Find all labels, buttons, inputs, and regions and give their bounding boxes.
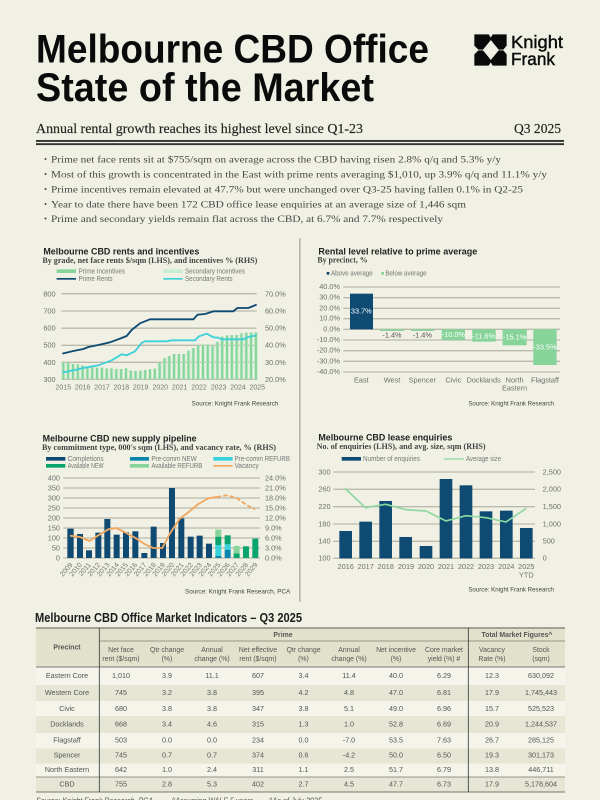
key points bullet list (44, 154, 547, 225)
average size line (345, 488, 526, 522)
subheading: By grade, net face rents $/sqm (LHS), and incentives % (RHS) (42, 255, 257, 265)
axis labels: 2024 (230, 385, 246, 392)
row: CBD: 17.9 (485, 780, 499, 788)
axis labels: 30.0% (265, 358, 286, 367)
y axis labels: -40.0% (317, 367, 340, 376)
bar value labels (351, 307, 557, 351)
y axis labels: 250 (48, 503, 60, 512)
y axis labels: 0 (56, 553, 60, 562)
axis labels: 2020 (153, 385, 168, 392)
row: Western Core: 4.2 (298, 688, 308, 697)
table header: Prime (273, 632, 293, 639)
key points bullet list: Prime net face rents sit at $755/sqm on average across the CBD having risen 2.8% q/q and 5.3% y/y (51, 154, 501, 165)
legend: Secondary Rents (185, 276, 233, 283)
y axis labels: 3.0% (265, 543, 282, 552)
legend: Prime Incentives (79, 268, 125, 275)
axis labels: 70.0% (265, 289, 286, 298)
table header: change (%) (194, 656, 230, 663)
row: Civic (59, 704, 554, 713)
source: Source: Knight Frank Research, PCA (185, 588, 291, 595)
bar value labels: -10.0% (442, 330, 465, 339)
y axis labels: 10.0% (319, 314, 340, 323)
axis labels: 1,500 (543, 502, 561, 511)
vacancy line (70, 495, 255, 548)
row: Spencer: 0.7 (162, 750, 172, 760)
y axis labels: 0.0% (323, 324, 340, 333)
row: Western Core: 17.9 (485, 688, 499, 697)
category labels: Eastern (502, 383, 527, 392)
row: Flagstaff: 285,125 (528, 736, 554, 744)
logo: Knight Frank: Frank (511, 49, 555, 69)
x axis year labels: 2009 (59, 562, 75, 578)
secondary rents line (62, 334, 257, 373)
y axis labels (317, 282, 340, 376)
row: CBD: 4.5 (344, 780, 354, 788)
row: Flagstaff: 26.7 (485, 736, 499, 744)
legend: Completions (68, 456, 104, 463)
axis labels: 2023 (211, 385, 227, 392)
axis labels: 400 (43, 358, 56, 367)
table header: Net effective (239, 647, 277, 654)
row: Civic: 3.8 (162, 704, 172, 713)
legend: Available NEW (68, 463, 104, 470)
table header: Annual (338, 647, 360, 654)
date: Q3 2025 (514, 122, 561, 137)
row: Eastern Core (46, 671, 554, 680)
key points bullet list: Year to date there have been 172 CBD office lease enquiries at an average size of 1,446 sqm (51, 199, 467, 210)
row: North Eastern: 6.79 (437, 765, 451, 774)
axis labels: 2017 (358, 562, 374, 571)
row: Flagstaff: 234 (252, 736, 264, 744)
source: Source: Knight Frank Research (468, 401, 554, 408)
row: CBD: 755 (115, 780, 127, 788)
axis labels: 2018 (114, 385, 129, 392)
x axis year labels: 2024 (198, 562, 213, 578)
table header: Annual (201, 647, 223, 654)
table header: Stock (532, 647, 550, 654)
row: Civic: Civic (59, 704, 75, 713)
y axis labels: 9.0% (265, 523, 282, 532)
category labels: Spencer (409, 375, 437, 384)
row: CBD: 2.7 (298, 780, 308, 788)
axis labels: 50.0% (265, 324, 286, 333)
legend: Number of enquiries (363, 456, 420, 463)
row: Eastern Core: 630,092 (528, 671, 554, 680)
bar value labels: -33.5% (533, 342, 557, 351)
x axis year labels: 2010 (69, 562, 84, 578)
bar value labels: -1.4% (413, 330, 432, 339)
row: Flagstaff: 0.0 (207, 736, 217, 744)
subheading: No. of enquiries (LHS), and avg. size, sqm (RHS) (317, 441, 486, 451)
row: Civic: 3.8 (207, 704, 217, 713)
source: Source: Knight Frank Research (192, 401, 279, 408)
row: Spencer: 301,173 (528, 750, 554, 760)
row: Civic: 3.8 (298, 704, 308, 713)
row: Western Core: 3.2 (162, 688, 172, 697)
x axis year labels: 2019 (151, 562, 167, 578)
table header: Core market (425, 647, 463, 654)
y axis labels: 24.0% (265, 473, 286, 482)
axis labels: 2015 (56, 385, 71, 392)
axis labels: 0 (543, 554, 547, 563)
row: Eastern Core: 12.3 (485, 671, 499, 680)
pipeline stacked bars (215, 530, 258, 558)
row: Western Core: 3.8 (207, 688, 217, 697)
axis labels: YTD (519, 570, 534, 579)
panel: rental level relative to prime average (317, 247, 560, 408)
row: Docklands: 1,244,537 (525, 720, 557, 728)
x axis year labels: 2027 (225, 562, 241, 578)
logo: Knight Frank (474, 32, 563, 69)
legend: Secondary Incentives (185, 268, 245, 275)
y axis labels: 6.0% (265, 533, 282, 542)
table header: Rate (%) (478, 656, 506, 663)
row: Western Core: 395 (252, 688, 264, 697)
category labels (354, 375, 560, 392)
table header: (%) (298, 656, 309, 663)
y axis labels: 21.0% (265, 483, 286, 492)
row: Docklands: 315 (252, 720, 264, 728)
row: Spencer: 6.50 (437, 750, 451, 760)
subheading: By precinct, % (317, 255, 368, 265)
row: CBD (59, 780, 557, 788)
row: Flagstaff: 0.0 (162, 736, 172, 744)
row: Eastern Core: 3.4 (298, 671, 308, 680)
row: Eastern Core: 1,010 (112, 671, 130, 680)
title (36, 28, 429, 110)
row: North Eastern: 13.8 (485, 765, 499, 774)
row: North Eastern: North Eastern (45, 765, 89, 774)
x axis year labels: 2016 (124, 562, 139, 578)
row: Civic: 347 (252, 704, 264, 713)
axis labels: 140 (318, 537, 331, 546)
axis labels: 2025 (250, 385, 265, 392)
table header: (%) (162, 656, 172, 663)
x axis year labels: 2023 (188, 562, 204, 578)
row: CBD: 5.3 (207, 780, 217, 788)
axis labels: 2023 (478, 562, 494, 571)
legend (57, 268, 245, 283)
axis labels (318, 467, 561, 579)
legend: Pre-comm REFURB (235, 456, 290, 463)
y axis labels: 200 (48, 513, 60, 522)
axis labels: 300 (43, 375, 56, 384)
row: Civic: 5.1 (344, 704, 354, 713)
table header: Net face (108, 647, 134, 654)
legend: Available REFURB (151, 463, 203, 470)
axis labels: 2,000 (543, 485, 561, 494)
axis labels: 700 (43, 306, 56, 315)
y axis labels: -10.0% (317, 335, 340, 344)
bar value labels: -11.6% (472, 331, 495, 340)
category labels: Flagstaff (531, 375, 560, 384)
panel: rents and incentives (42, 247, 286, 408)
legend (342, 456, 501, 463)
y axis labels: 300 (48, 493, 60, 502)
x axis year labels: 2025 (207, 562, 223, 578)
panel: new supply pipeline (42, 434, 291, 595)
y axis labels: 50 (52, 543, 60, 552)
y axis labels: 400 (48, 473, 60, 482)
row: Spencer: 19.3 (485, 750, 499, 760)
row: Flagstaff (53, 736, 554, 744)
y axis labels: 100 (48, 533, 60, 542)
row: Docklands: 1.3 (298, 720, 308, 728)
source: Source: Knight Frank Research (468, 586, 554, 593)
title: State of the Market (36, 66, 374, 110)
prime rents line (62, 305, 257, 354)
row: Spencer: 374 (252, 750, 264, 760)
x axis year labels: 2011 (78, 562, 93, 578)
row: Flagstaff: 503 (115, 736, 127, 744)
panel: lease enquiries (317, 433, 561, 593)
axis labels: 180 (318, 519, 331, 528)
row: Docklands: 3.4 (162, 720, 172, 728)
legend: Prime Rents (79, 276, 113, 283)
row: Flagstaff: -7.0 (343, 736, 355, 744)
table header: Total Market Figures^ (482, 631, 552, 639)
x axis year labels: 2013 (96, 562, 112, 578)
table header (53, 631, 552, 663)
row: North Eastern: 1.1 (298, 765, 308, 774)
y axis labels: 0.0% (265, 553, 282, 562)
x axis year labels: 2020 (161, 562, 176, 578)
row: Western Core: 6.81 (437, 688, 451, 697)
axis labels: 1,000 (543, 519, 561, 528)
row: Western Core: 4.8 (344, 688, 354, 697)
row: Civic: 680 (115, 704, 127, 713)
axis labels: 60.0% (265, 306, 286, 315)
y axis labels: 12.0% (265, 513, 286, 522)
table header: Net incentive (376, 647, 416, 654)
axis labels: 2019 (398, 562, 414, 571)
axis labels: 800 (43, 289, 56, 298)
axis labels: 600 (43, 324, 56, 333)
row: Flagstaff: 53.5 (389, 736, 403, 744)
axis labels: 2018 (378, 562, 394, 571)
x axis year labels: 2012 (87, 562, 102, 578)
x axis year labels: 2029 (244, 562, 260, 578)
axis labels: 2016 (75, 385, 91, 392)
x axis year labels: 2018 (142, 562, 158, 578)
y axis labels: 18.0% (265, 493, 286, 502)
row: North Eastern: 642 (115, 765, 127, 774)
y axis labels: 20.0% (319, 303, 340, 312)
key points bullet list: Prime incentives remain elevated at 47.7% but were unchanged over Q3-25 having fallen 0.1% in Q2-25 (51, 184, 523, 195)
legend (46, 456, 290, 470)
row: Spencer: 50.0 (389, 750, 403, 760)
row: Spencer (54, 750, 554, 760)
axis labels: 2,500 (543, 467, 561, 476)
row: Docklands: 668 (115, 720, 127, 728)
row: Spencer: -4.2 (343, 750, 355, 760)
heading: Melbourne CBD new supply pipeline (43, 434, 197, 444)
axis labels: 2019 (133, 385, 149, 392)
y axis labels: -30.0% (317, 356, 340, 365)
row: CBD: CBD (59, 780, 75, 788)
row: Civic: 525,523 (528, 704, 554, 713)
row: Civic: 15.7 (485, 704, 499, 713)
row: CBD: 2.8 (162, 780, 172, 788)
axis labels: 260 (318, 485, 331, 494)
axis labels: 2025 (518, 562, 534, 571)
axis labels (43, 289, 286, 392)
row: Docklands: 20.9 (485, 720, 499, 728)
axis labels: 2017 (94, 385, 110, 392)
row: North Eastern: 1.0 (162, 765, 172, 774)
bar value labels: -15.1% (503, 333, 527, 342)
key points bullet list: Most of this growth is concentrated in the East with prime rents averaging $1,010, up 3.9% q/q and 11.1% y/y (51, 169, 547, 180)
row: Eastern Core: 11.4 (342, 671, 356, 680)
x axis year labels: 2017 (133, 562, 149, 578)
x axis year labels: 2026 (216, 562, 232, 578)
heading: Melbourne CBD rents and incentives (43, 247, 199, 257)
title: Melbourne CBD Office (36, 28, 429, 72)
row: Civic: 49.0 (389, 704, 403, 713)
y axis labels: 150 (48, 523, 60, 532)
row: Civic: 6.96 (437, 704, 451, 713)
enquiries bars (339, 479, 533, 558)
table header: (sqm) (532, 656, 550, 663)
axis labels: 2022 (191, 385, 207, 392)
category labels: East (354, 375, 369, 384)
row: Western Core: 745 (115, 688, 127, 697)
table header: rent ($/sqm) (102, 656, 140, 663)
row: North Eastern: 2.5 (344, 765, 354, 774)
table: market indicators (36, 628, 565, 792)
row: Western Core (45, 688, 557, 697)
legend: Above average (331, 270, 373, 277)
y axis labels: 15.0% (265, 503, 286, 512)
y axis labels: 30.0% (319, 293, 340, 302)
row: Spencer: 0.6 (298, 750, 308, 760)
row: Flagstaff: 0.0 (298, 736, 308, 744)
category labels: North (506, 375, 524, 384)
axis labels: 500 (43, 341, 56, 350)
row: North Eastern: 2.4 (207, 765, 217, 774)
row: Eastern Core: 6.29 (437, 671, 451, 680)
heading: Melbourne CBD lease enquiries (318, 433, 452, 443)
row: Docklands: 4.6 (207, 720, 217, 728)
table header: Qtr change (286, 647, 321, 654)
legend: Pre-comm NEW (151, 456, 197, 463)
bars (350, 294, 557, 365)
axis labels: 40.0% (265, 341, 286, 350)
row: Spencer: 745 (115, 750, 127, 760)
row: Eastern Core: 607 (252, 671, 264, 680)
y axis labels (48, 473, 286, 562)
category labels: Docklands (467, 375, 501, 384)
x axis year labels: 2028 (235, 562, 250, 578)
row: Docklands: 6.69 (437, 720, 451, 728)
legend: Below average (385, 270, 427, 277)
subtitle: Annual rental growth reaches its highest level since Q1-23 (36, 122, 363, 137)
row: Western Core: 47.0 (389, 688, 403, 697)
row: Docklands: 52.8 (389, 720, 403, 728)
table heading: Melbourne CBD Office Market Indicators – Q3 2025 (35, 611, 302, 625)
subheading: By commitment type, 000's sqm (LHS), and vacancy rate, % (RHS) (42, 442, 276, 452)
axis labels: 100 (318, 554, 331, 563)
row: CBD: 6.73 (437, 780, 451, 788)
completions bars (67, 488, 212, 558)
category labels: West (384, 375, 400, 384)
x axis year labels (59, 562, 260, 578)
row: Eastern Core: 11.1 (205, 671, 219, 680)
row: CBD: 5,178,604 (525, 780, 557, 788)
row: North Eastern: 311 (252, 765, 264, 774)
row: North Eastern: 446,711 (528, 765, 554, 774)
table header: change (%) (331, 656, 367, 663)
axis labels: 2021 (172, 385, 188, 392)
row: Spencer: 0.7 (207, 750, 217, 760)
y axis labels: -20.0% (317, 346, 340, 355)
axis labels: 2022 (458, 562, 474, 571)
logo: Knight Frank: Knight (511, 32, 563, 52)
axis labels: 2016 (338, 562, 354, 571)
row: Western Core: 1,745,443 (525, 688, 557, 697)
row: Eastern Core: 40.0 (389, 671, 403, 680)
row: CBD: 47.7 (389, 780, 403, 788)
row: North Eastern: 51.7 (389, 765, 403, 774)
axis labels: 2024 (498, 562, 514, 571)
key points bullet list: Prime and secondary yields remain flat across the CBD, at 6.7% and 7.7% respectively (51, 214, 443, 225)
bar value labels: 33.7% (351, 307, 372, 316)
axis labels: 20.0% (265, 375, 286, 384)
incentive bars (63, 332, 256, 379)
row: Western Core: Western Core (45, 688, 89, 697)
axis labels: 2021 (438, 562, 454, 571)
x axis year labels: 2014 (106, 562, 121, 578)
table footnotes (36, 796, 322, 800)
x axis year labels: 2015 (114, 562, 130, 578)
category labels: Civic (445, 375, 462, 384)
legend: Vacancy (235, 463, 259, 470)
table header: Vacancy (479, 647, 506, 654)
axis labels: 2020 (418, 562, 434, 571)
y axis labels: 40.0% (319, 282, 340, 291)
table header: (%) (391, 656, 401, 663)
row: Flagstaff: 7.63 (437, 736, 451, 744)
x axis year labels: 2022 (179, 562, 195, 578)
row: Eastern Core: 3.9 (162, 671, 172, 680)
table header: Qtr change (150, 647, 184, 654)
row: CBD: 402 (252, 780, 264, 788)
row: Docklands: 1.0 (344, 720, 354, 728)
row: Docklands: Docklands (50, 720, 84, 728)
row: North Eastern (45, 765, 554, 774)
table header: yield (%) # (428, 656, 460, 663)
y axis labels: 350 (48, 483, 60, 492)
row: Flagstaff: Flagstaff (53, 736, 81, 744)
axis labels: 500 (543, 537, 555, 546)
bar value labels: -1.4% (382, 330, 402, 339)
x axis year labels: 2021 (170, 562, 186, 578)
axis labels: 300 (318, 467, 331, 476)
table header: Precinct (53, 644, 81, 652)
legend: Average size (466, 456, 501, 463)
heading: Rental level relative to prime average (318, 247, 477, 257)
axis labels: 220 (318, 502, 331, 511)
row: Spencer: Spencer (54, 750, 81, 760)
table header: rent ($/sqm) (239, 656, 277, 663)
row: Docklands (50, 720, 557, 728)
row: Eastern Core: Eastern Core (46, 671, 88, 680)
legend (327, 270, 427, 277)
